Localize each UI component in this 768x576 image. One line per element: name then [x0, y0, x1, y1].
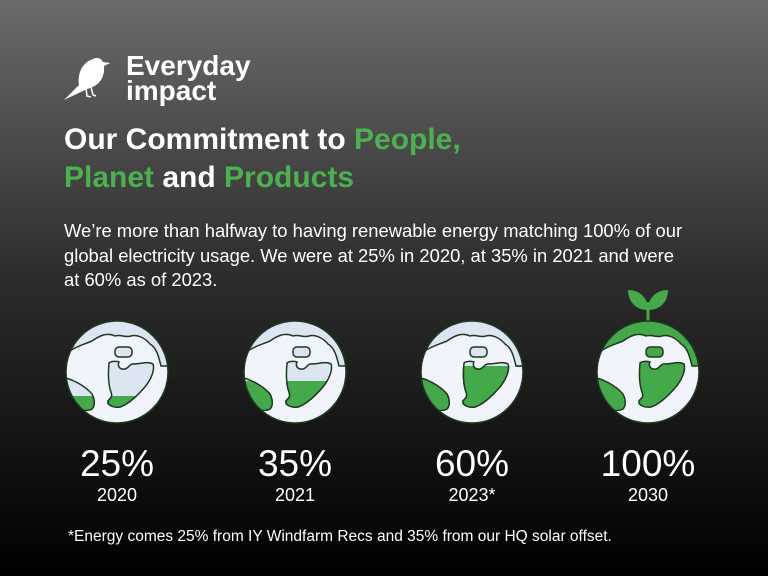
text block: intro: We’re more than halfway to having renewable energy matching 100% of our global electricity usage. We were at 25% in 2020, at 35% in 2021 and were at 60% as of 2023. [64, 220, 682, 290]
stat 2021: 2021 [275, 485, 315, 505]
globe 2021 [243, 320, 347, 424]
title: Our Commitment to People, [64, 123, 461, 156]
stat 2023: 2023* [448, 485, 496, 505]
stat 2030: 2030 [628, 485, 668, 505]
stat 2023: 60% [435, 443, 509, 484]
title [64, 123, 461, 194]
footnote: *Energy comes 25% from IY Windfarm Recs and 35% from our HQ solar offset. [68, 528, 612, 545]
stat 2021: 35% [258, 443, 332, 484]
stat 2020: 2020 [97, 485, 137, 505]
stat 2020: 25% [80, 443, 154, 484]
globe 2020 [65, 320, 169, 424]
globe 2023 [420, 320, 524, 424]
stat 2020 [80, 443, 154, 505]
stat 2030: 100% [601, 443, 695, 484]
globe 2030 with sprout [596, 290, 700, 424]
logo text: Everyday [126, 50, 251, 81]
stat 2021 [258, 443, 332, 505]
stat 2023 [435, 443, 509, 505]
stat 2030 [601, 443, 695, 505]
logo text: impact [126, 75, 216, 106]
icon: sprout [628, 290, 668, 322]
logo [64, 50, 251, 106]
title: Planet and Products [64, 161, 354, 194]
logo text [126, 50, 251, 106]
icon: bird [64, 58, 110, 100]
